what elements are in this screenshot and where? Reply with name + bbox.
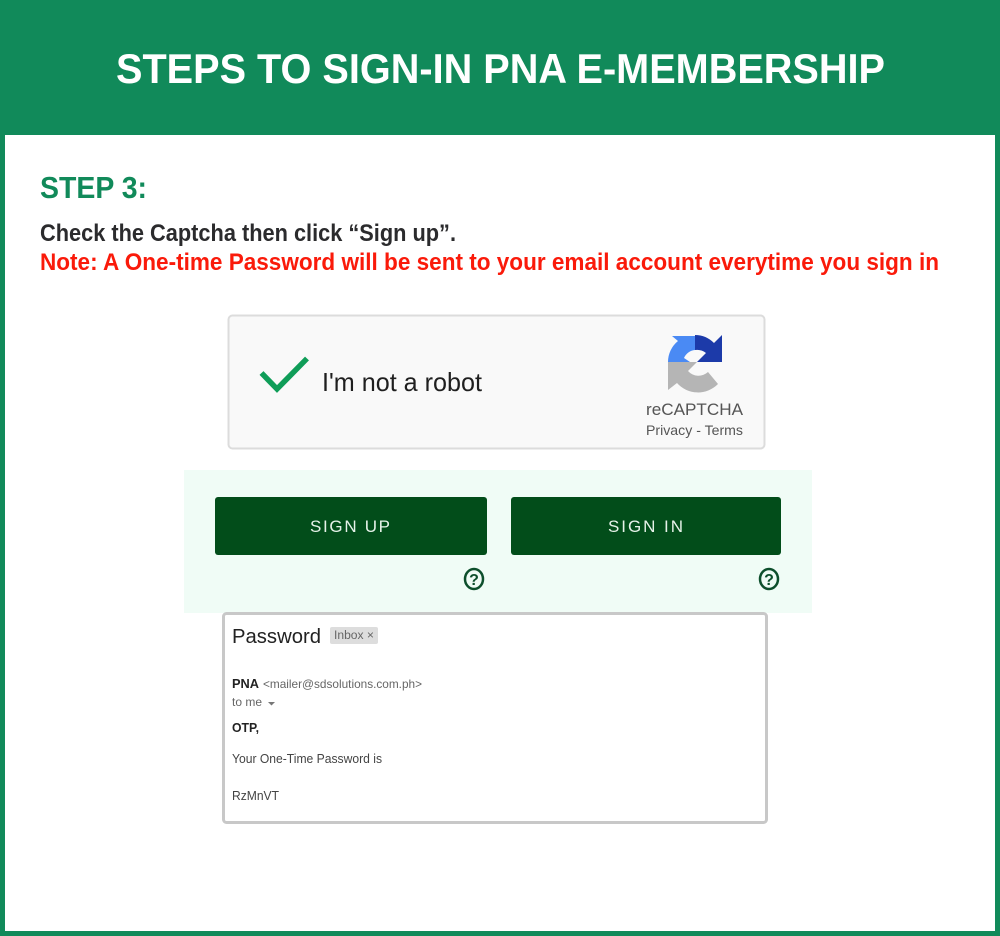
button: sign in: SIGN IN	[608, 517, 683, 536]
icon: help sign up	[465, 569, 483, 589]
sender: <mailer@sdsolutions.com.ph>	[263, 677, 422, 691]
note text: Note: A One-time Password will be sent to your email account everytime you sign in	[40, 249, 939, 276]
step heading: STEP 3:	[40, 170, 147, 205]
captcha label: I'm not a robot	[322, 367, 483, 397]
instruction text: Check the Captcha then click “Sign up”.	[40, 220, 456, 247]
icon: help sign in	[760, 569, 778, 589]
button: sign in	[511, 497, 781, 555]
icon: help sign in: ?	[764, 572, 774, 589]
icon: check mark	[262, 358, 307, 389]
panel: email	[224, 614, 766, 822]
icon: recaptcha logo	[668, 335, 722, 392]
recaptcha label: reCAPTCHA	[646, 400, 744, 419]
inbox chip: Inbox ×	[334, 630, 374, 642]
one-time password: RzMnVT	[232, 788, 279, 803]
email subject: Password	[232, 626, 321, 648]
button: sign up: SIGN UP	[310, 517, 390, 536]
sender: PNA	[232, 677, 259, 691]
button: sign up	[215, 497, 487, 555]
privacy and terms links: Privacy - Terms	[646, 422, 743, 438]
icon: help sign up: ?	[469, 572, 479, 589]
email body: Your One-Time Password is	[232, 751, 382, 766]
header banner	[0, 0, 1000, 135]
recipient: to me	[232, 695, 262, 709]
title: STEPS TO SIGN-IN PNA E-MEMBERSHIP	[116, 45, 885, 92]
recipient	[232, 695, 275, 709]
panel: captcha	[228, 316, 764, 448]
panel: buttons	[184, 470, 812, 613]
greeting: OTP,	[232, 721, 259, 735]
inbox chip	[330, 627, 378, 644]
